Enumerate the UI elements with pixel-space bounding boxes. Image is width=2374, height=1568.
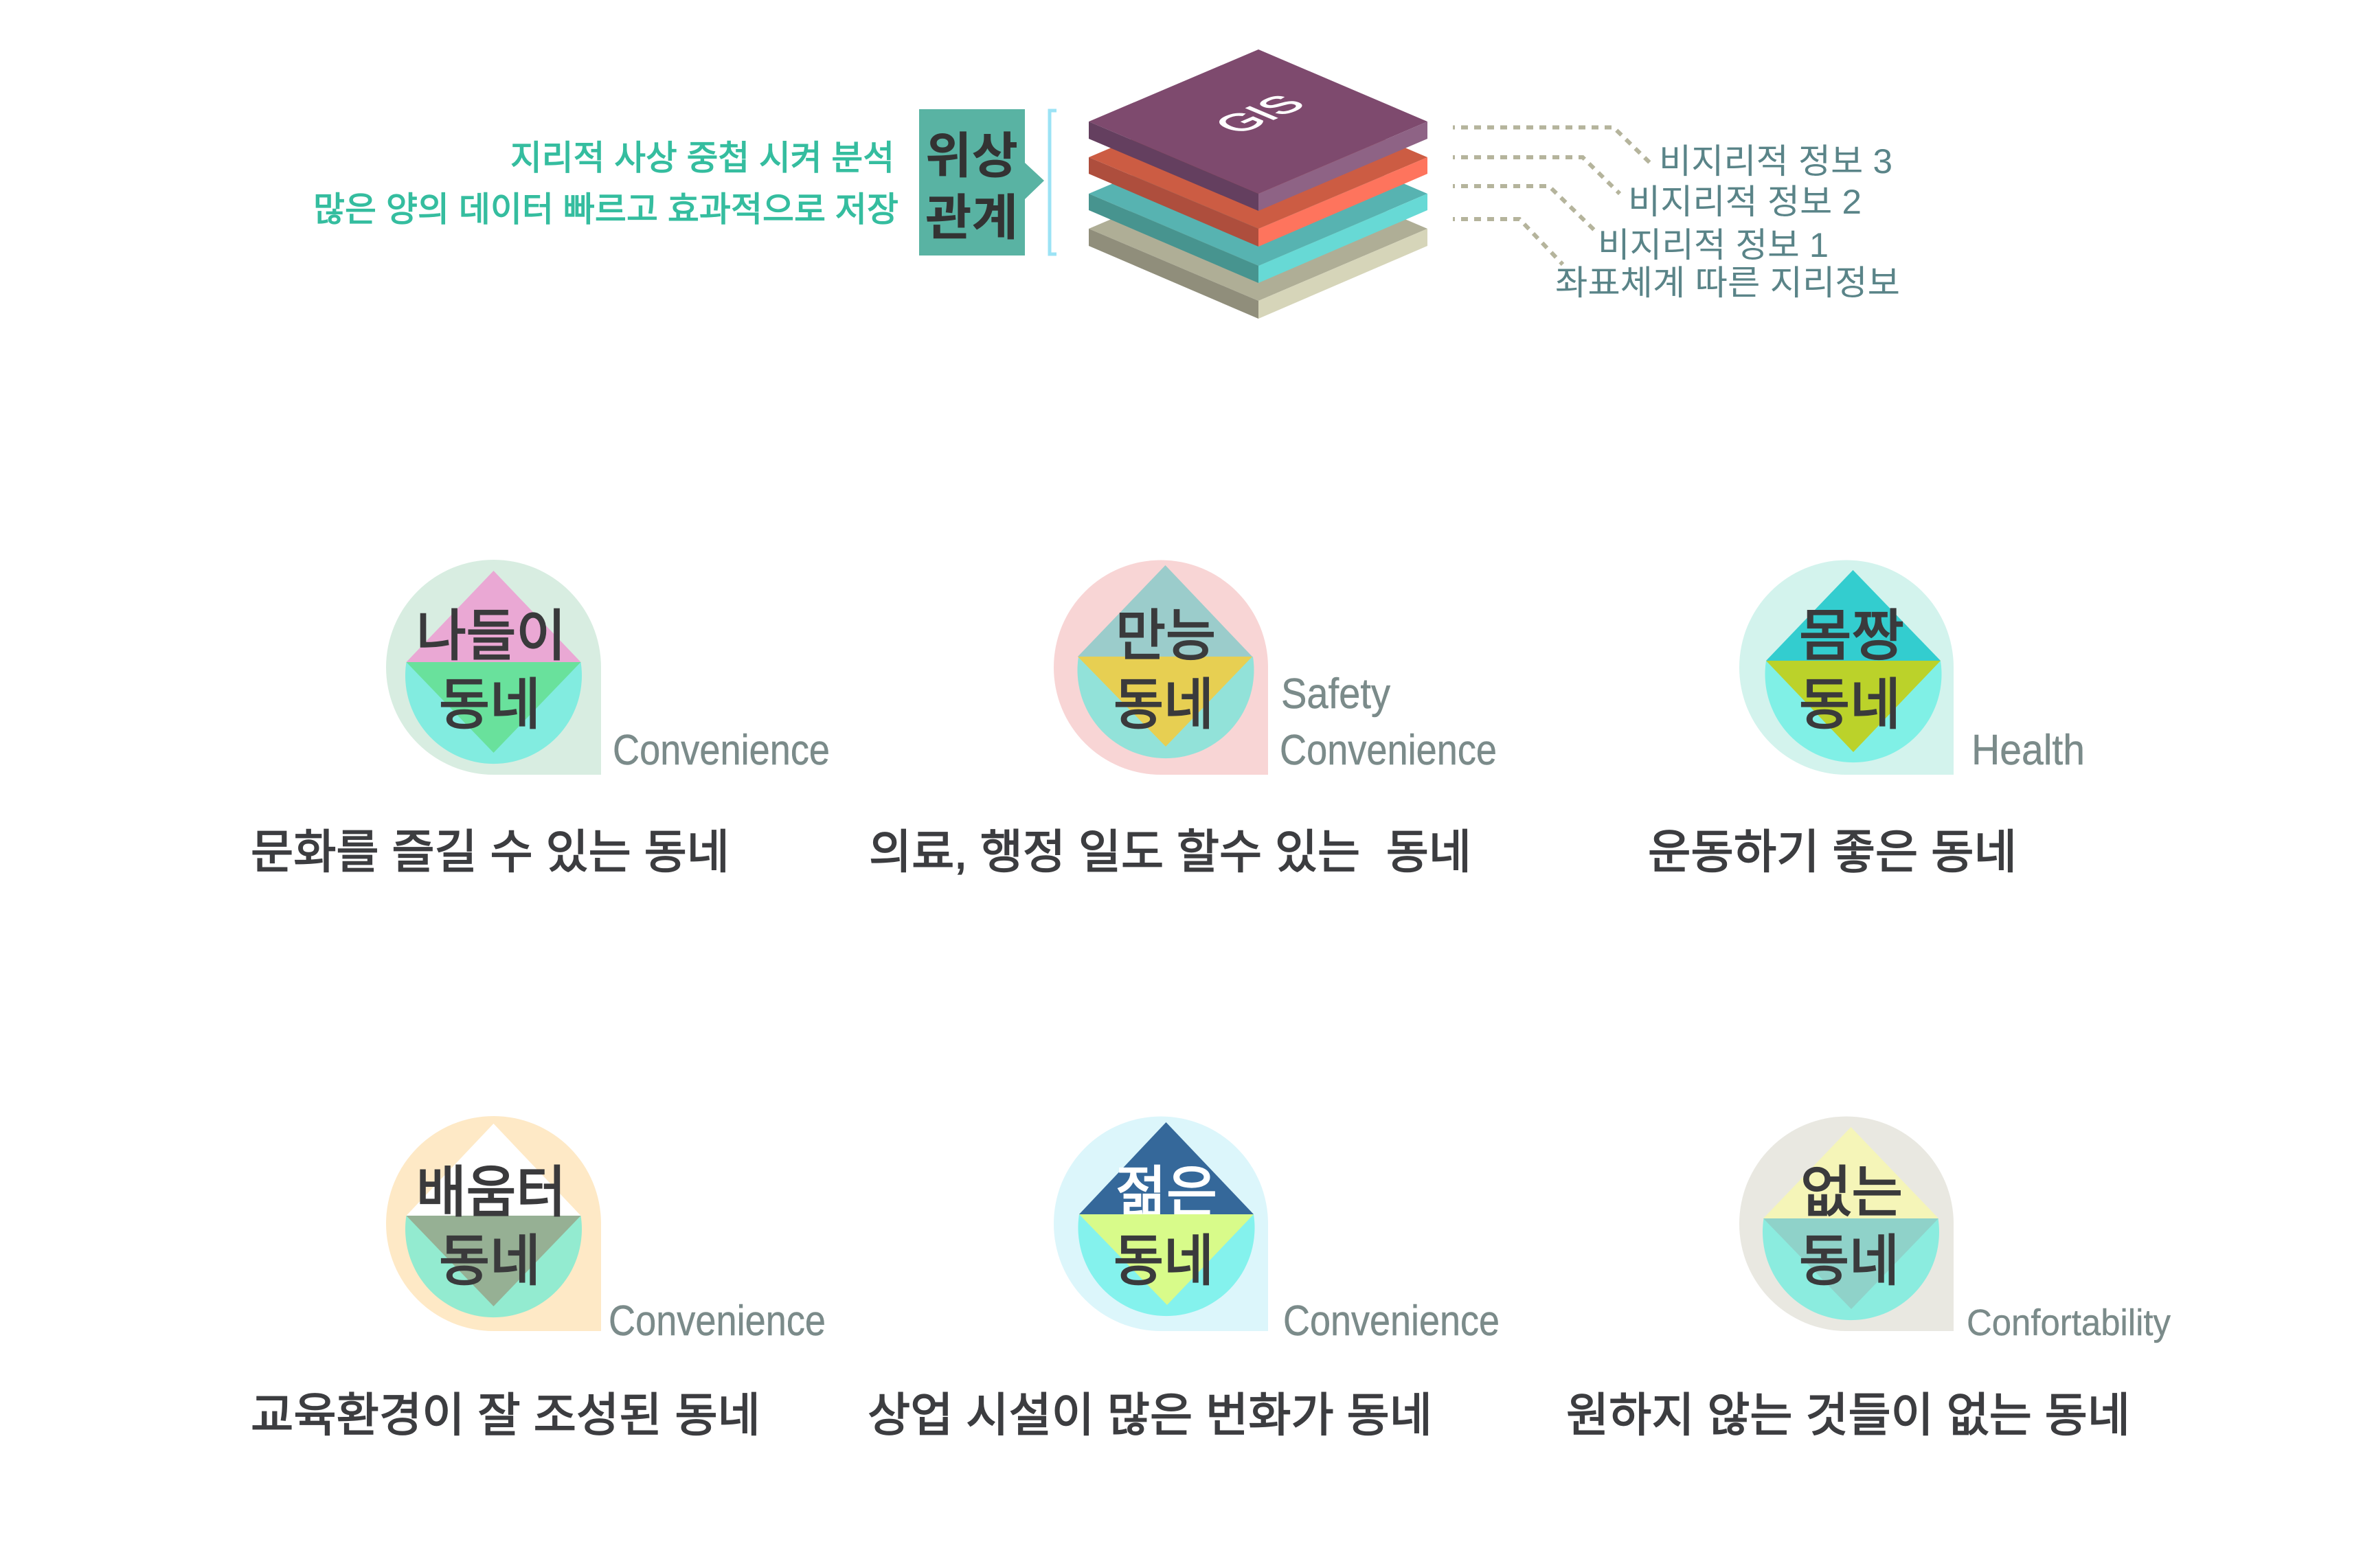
text block: topology description: 지리적 사상 중첩 시켜 분석 — [510, 139, 894, 177]
text block: topology description: 많은 양의 데이터 빠르고 효과적으로 저장 — [313, 190, 898, 229]
label: information 2: 비지리적 정보 2 — [1628, 183, 1862, 221]
icon: 배움터 동네 drop: 동네 — [439, 1231, 541, 1293]
category label: Safety: Safety — [1281, 670, 1390, 718]
heading tag: 위상 관계: 관계 — [925, 191, 1018, 246]
category label: Convenience — [1283, 1297, 1500, 1345]
icon: 없는 동네 drop: 동네 — [1799, 1231, 1899, 1293]
icon: 젊은 동네 drop — [1054, 1117, 1268, 1331]
category label: Convenience — [609, 1297, 826, 1345]
description: 상업 시설이 많은 번화가 동네 — [868, 1389, 1432, 1442]
panel: 나들이 동네 — [251, 560, 830, 878]
panel: 만능 동네 — [869, 560, 1497, 878]
layer: non-geographic information 3 (GIS): GIS — [1203, 90, 1317, 138]
heading tag: 위상 관계: 위상 — [925, 129, 1018, 184]
icon: 젊은 동네 drop: 젊은 — [1116, 1162, 1217, 1224]
layer: non-geographic information 3 (GIS) — [1089, 49, 1427, 211]
panel: 없는 동네 — [1566, 1117, 2171, 1442]
leader line: base information — [1453, 219, 1563, 264]
leader line: information 1 — [1453, 186, 1594, 230]
icon: 없는 동네 drop — [1739, 1117, 1954, 1331]
icon: 몸짱 동네 drop: 동네 — [1799, 674, 1901, 736]
icon: 젊은 동네 drop: 동네 — [1113, 1231, 1214, 1293]
icon: 나들이 동네 drop: 동네 — [439, 674, 541, 736]
leader line: information 2 — [1453, 157, 1620, 194]
description: 교육환경이 잘 조성된 동네 — [251, 1389, 760, 1442]
category label: Convenience — [613, 727, 830, 774]
icon: 없는 동네 drop: 없는 — [1800, 1162, 1903, 1224]
icon: 만능 동네 drop: 동네 — [1113, 674, 1214, 736]
description: 의료, 행정 일도 할수 있는 동네 — [869, 826, 1471, 878]
category label: Convenience: Convenience — [1280, 727, 1497, 774]
icon: 나들이 동네 drop: 나들이 — [416, 606, 566, 668]
icon: 몸짱 동네 drop: 몸짱 — [1799, 606, 1904, 668]
icon: 나들이 동네 drop — [386, 560, 601, 775]
label: information 1: 비지리적 정보 1 — [1598, 226, 1829, 264]
panel: 몸짱 동네 — [1648, 560, 2085, 878]
label: information 3: 비지리적 정보 3 — [1659, 142, 1892, 181]
layer: base geographic information — [1089, 157, 1427, 319]
icon: 배움터 동네 drop: 배움터 — [416, 1162, 566, 1224]
layer: non-geographic information 1 — [1089, 122, 1427, 283]
leader line: information 3 — [1453, 128, 1651, 164]
description: 운동하기 좋은 동네 — [1648, 826, 2017, 878]
panel: 젊은 동네 — [868, 1117, 1500, 1442]
icon: 만능 동네 drop: 만능 — [1116, 606, 1216, 668]
icon: 만능 동네 drop — [1054, 560, 1268, 775]
description: 문화를 즐길 수 있는 동네 — [251, 826, 730, 878]
panel: 배움터 동네 — [251, 1116, 826, 1442]
icon: 배움터 동네 drop — [386, 1116, 601, 1331]
layer: non-geographic information 2 — [1089, 85, 1427, 247]
category label: Health — [1971, 727, 2085, 774]
icon: 몸짱 동네 drop — [1739, 560, 1954, 775]
bracket — [1050, 111, 1056, 254]
label: base geographic information: 좌표체계 따른 지리정보 — [1555, 264, 1900, 302]
heading tag: 위상 관계 — [919, 109, 1044, 255]
panel: topology GIS diagram — [313, 49, 1900, 319]
category label: Confortability — [1967, 1302, 2171, 1343]
layer stack: GIS layers — [1089, 49, 1427, 319]
description: 원하지 않는 것들이 없는 동네 — [1566, 1389, 2130, 1442]
text block: topology description — [313, 139, 898, 229]
